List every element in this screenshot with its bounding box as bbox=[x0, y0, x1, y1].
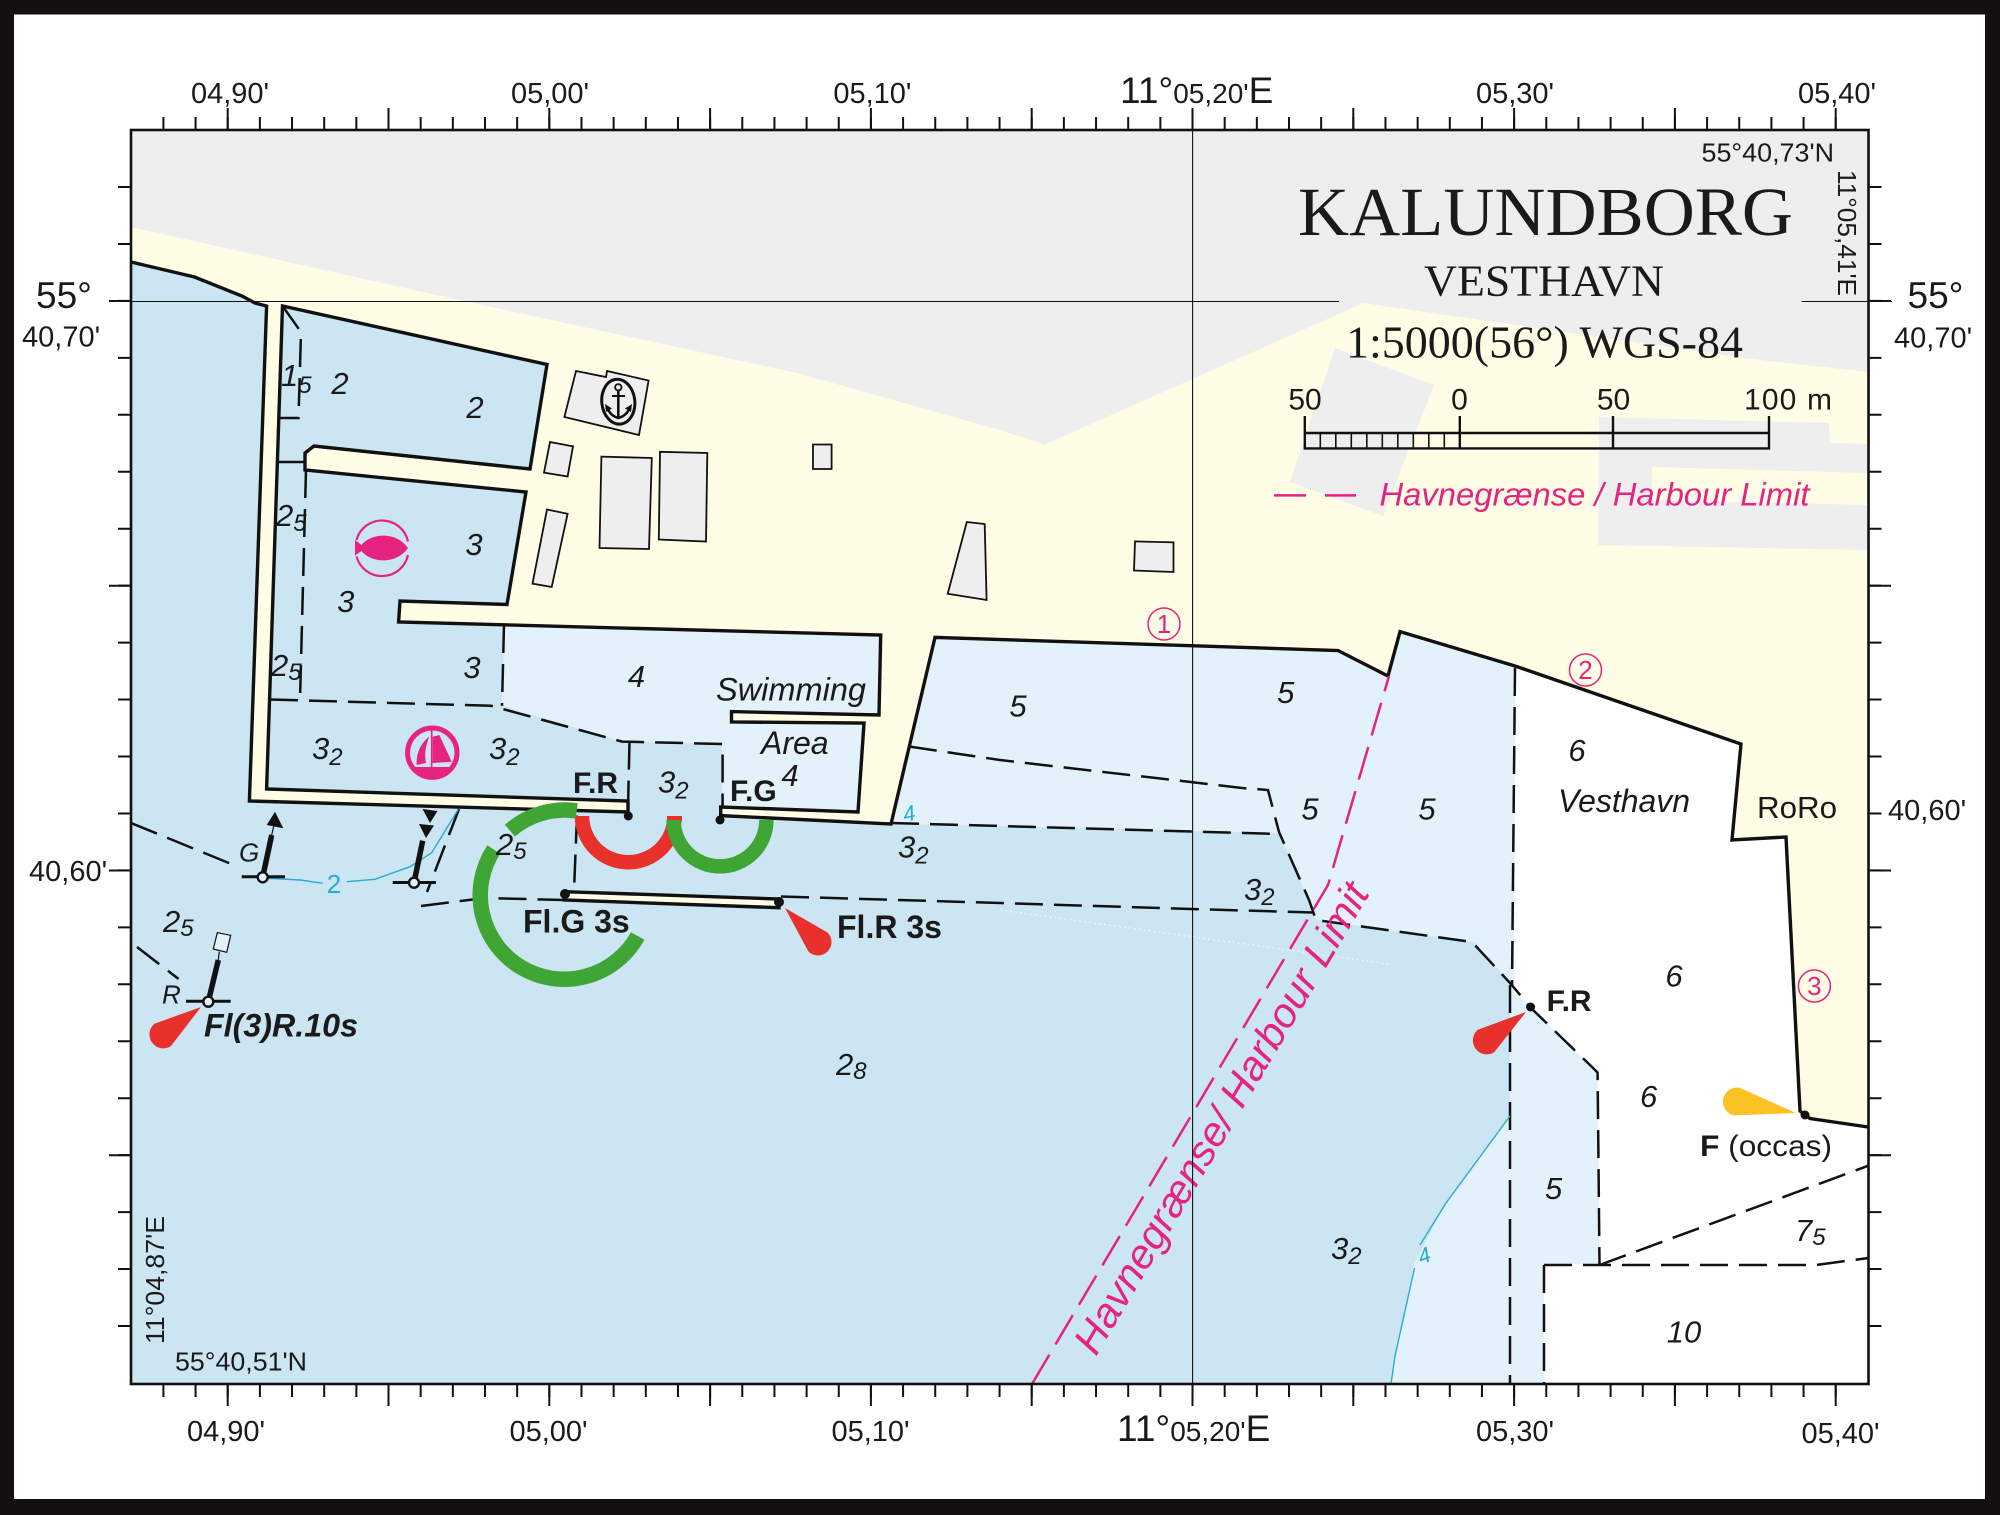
numbered markers bbox=[1148, 608, 1830, 1002]
right latitude labels bbox=[1888, 275, 1972, 827]
top longitude labels bbox=[191, 70, 1876, 111]
light flare: Fl.R 3s bbox=[785, 908, 831, 955]
light sector: F.G green arc bbox=[674, 820, 766, 866]
light labels bbox=[204, 767, 1832, 1163]
sounding 2.5: 5 bbox=[288, 659, 302, 686]
water: deep white zone bbox=[1514, 666, 1868, 1384]
scale label 0: 0 bbox=[1451, 384, 1468, 417]
left label 40,70: 40,70' bbox=[22, 322, 100, 354]
label RoRo: RoRo bbox=[1757, 790, 1837, 825]
building with anchor bbox=[564, 371, 649, 435]
sounding 6: 6 bbox=[1640, 1079, 1658, 1114]
cyan contour label 4: 4 bbox=[1414, 1242, 1434, 1269]
label Swimming: Swimming bbox=[716, 671, 866, 707]
sounding 3.2: 2 bbox=[914, 843, 929, 870]
detached breakwater bbox=[564, 892, 779, 908]
panel: chart map area bbox=[109, 130, 1892, 1384]
sounding 3: 3 bbox=[465, 527, 483, 562]
right label 40,60: 40,60' bbox=[1888, 795, 1966, 827]
light sector: F.R red arc bbox=[582, 816, 675, 862]
top label 05,10: 05,10' bbox=[833, 78, 911, 110]
title block bbox=[1298, 174, 1793, 368]
sounding 7.5: 7 bbox=[1795, 1213, 1812, 1248]
bottom label 05,30: 05,30' bbox=[1476, 1416, 1554, 1448]
red sector cap bbox=[667, 816, 682, 821]
marker 2: 2 bbox=[1578, 655, 1593, 685]
graticule lines bbox=[109, 130, 1892, 1384]
light flare: F.R east bbox=[1473, 1012, 1526, 1054]
cyan contour label 4 near pier: 4 bbox=[901, 800, 918, 827]
water: harbour light depth zone bbox=[891, 632, 1600, 1384]
marker 3 bbox=[1798, 970, 1830, 1002]
cyan 4 metre contour bbox=[1391, 1268, 1414, 1384]
sounding 3.2: 3 bbox=[1244, 872, 1261, 907]
label beacon R: R bbox=[162, 979, 181, 1009]
light sector: Fl.G upper green arc bbox=[510, 810, 577, 831]
sounding 5: 5 bbox=[1009, 688, 1027, 723]
corner coordinates bbox=[140, 137, 1862, 1377]
sounding 3.2: 3 bbox=[658, 765, 675, 800]
sounding 3.2: 3 bbox=[489, 731, 506, 766]
place labels bbox=[162, 671, 1837, 1009]
scale and datum: 1:5000(56°) WGS-84 bbox=[1346, 317, 1743, 368]
building bbox=[1134, 541, 1174, 572]
cyan 2 metre contour continued bbox=[347, 809, 458, 882]
left latitude labels bbox=[22, 275, 107, 888]
label beacon G: G bbox=[239, 838, 259, 868]
label F.R east: F.R bbox=[1547, 985, 1592, 1018]
faint dotted line bbox=[1000, 910, 1389, 964]
sounding 1.5: 5 bbox=[298, 372, 312, 399]
harbour limit dashed line bbox=[1032, 676, 1389, 1384]
sounding 2: 2 bbox=[330, 366, 349, 401]
label F.R pier: F.R bbox=[573, 767, 618, 800]
sounding 7.5: 5 bbox=[1812, 1224, 1826, 1251]
coordinate bottom left longitude: 11°04,87'E bbox=[140, 1216, 170, 1344]
sounding 2.5: 5 bbox=[180, 915, 194, 942]
icon: anchor bbox=[600, 378, 637, 426]
sounding 1.5: 1 bbox=[281, 358, 298, 393]
cyan contour label 2: 2 bbox=[327, 869, 341, 899]
icon: sailing boat bbox=[408, 727, 457, 780]
land: grey industrial block bbox=[1598, 417, 1868, 550]
depth contour dashed lines bbox=[131, 306, 1869, 1384]
label F.G pier: F.G bbox=[730, 775, 777, 808]
sounding 3: 3 bbox=[337, 584, 354, 619]
sounding 2.8: 8 bbox=[853, 1058, 867, 1085]
icon: fish bbox=[355, 520, 408, 576]
right label 55°: 55° bbox=[1908, 275, 1963, 316]
building bbox=[544, 442, 573, 476]
label Fl.G 3s: Fl.G 3s bbox=[523, 904, 630, 940]
sounding 3: 3 bbox=[463, 650, 481, 685]
coordinate bottom left latitude: 55°40,51'N bbox=[175, 1347, 307, 1377]
light dot markers bbox=[560, 812, 1810, 1120]
scale bar bbox=[1288, 384, 1832, 448]
sounding 2: 2 bbox=[465, 390, 484, 425]
land: grey built-up area bbox=[131, 130, 1869, 460]
marker 3: 3 bbox=[1807, 971, 1822, 1001]
subtitle VESTHAVN: VESTHAVN bbox=[1424, 257, 1664, 306]
harbour limit rotated label: Havnegrænse/ Harbour Limit bbox=[1064, 873, 1379, 1362]
map border bbox=[131, 130, 1868, 1384]
top label 05,00: 05,00' bbox=[511, 78, 589, 110]
label Fl.R 3s: Fl.R 3s bbox=[837, 909, 942, 945]
marker 2 bbox=[1570, 654, 1602, 686]
sounding 5: 5 bbox=[1301, 792, 1319, 826]
sounding 3.2: 2 bbox=[328, 744, 343, 771]
label Fl(3)R.10s: Fl(3)R.10s bbox=[204, 1008, 358, 1044]
sounding 3.2: 2 bbox=[1347, 1243, 1362, 1270]
scale label 100 m: 100 m bbox=[1744, 384, 1832, 417]
building bbox=[948, 522, 987, 600]
sounding 2.5: 5 bbox=[513, 838, 527, 865]
bottom longitude labels bbox=[187, 1408, 1880, 1450]
beacon with down triangles bbox=[393, 809, 438, 888]
sounding 3.2: 2 bbox=[1260, 884, 1275, 911]
left label 40,60: 40,60' bbox=[29, 856, 107, 888]
sounding 2.5: 2 bbox=[276, 498, 293, 533]
light flare: F occas yellow bbox=[1723, 1088, 1796, 1115]
sounding 6: 6 bbox=[1568, 733, 1586, 768]
light flare: Fl(3)R bbox=[149, 1007, 201, 1048]
light sector: Fl.G main green arc bbox=[480, 850, 638, 979]
sounding 2.5: 5 bbox=[293, 510, 307, 537]
sounding 5: 5 bbox=[1418, 792, 1436, 826]
sounding 5: 5 bbox=[1545, 1171, 1563, 1206]
top label 05,40: 05,40' bbox=[1798, 78, 1876, 110]
building bbox=[532, 510, 568, 587]
scale label 50: 50 bbox=[1288, 384, 1322, 417]
label Vesthavn: Vesthavn bbox=[1558, 783, 1690, 819]
sounding 3.2: 2 bbox=[505, 744, 520, 771]
building bbox=[813, 444, 832, 469]
water: swimming area light depth zone bbox=[502, 625, 880, 812]
left label 55°: 55° bbox=[36, 275, 92, 316]
sounding 3.2: 3 bbox=[898, 830, 915, 865]
top label 04,90: 04,90' bbox=[191, 78, 269, 110]
right label 40,70: 40,70' bbox=[1894, 322, 1972, 354]
sounding 6: 6 bbox=[1665, 959, 1683, 994]
top label 05,30: 05,30' bbox=[1476, 78, 1554, 110]
coordinate top right latitude: 55°40,73'N bbox=[1702, 137, 1834, 167]
sounding 10: 10 bbox=[1667, 1314, 1701, 1350]
legend: harbour limit: Havnegrænse / Harbour Limit bbox=[1380, 477, 1811, 513]
sea: shallow blue water bbox=[131, 130, 1869, 1384]
bottom label 11°05,20'E: 11°05,20'E bbox=[1117, 1408, 1270, 1449]
sounding 2.5: 2 bbox=[271, 648, 288, 683]
sounding 4: 4 bbox=[628, 659, 645, 694]
bottom label 05,00: 05,00' bbox=[509, 1416, 588, 1448]
coastline outline bbox=[131, 262, 1868, 1127]
bottom label 05,40: 05,40' bbox=[1801, 1418, 1880, 1450]
sounding 3.2: 3 bbox=[312, 731, 329, 766]
marker 1 bbox=[1148, 608, 1180, 640]
sounding 2.8: 2 bbox=[836, 1047, 853, 1082]
bottom label 05,10: 05,10' bbox=[831, 1416, 910, 1448]
cyan 4 metre contour continued bbox=[1420, 1116, 1510, 1245]
bottom label 04,90: 04,90' bbox=[187, 1416, 265, 1448]
marker 1: 1 bbox=[1157, 609, 1171, 639]
beacon G bbox=[242, 812, 285, 882]
sounding 3.2: 2 bbox=[674, 778, 689, 805]
building bbox=[600, 457, 652, 549]
label F (occas): F (occas) bbox=[1700, 1130, 1832, 1163]
sounding 3.2: 3 bbox=[1331, 1231, 1348, 1266]
label Area: Area bbox=[759, 725, 829, 761]
top label 11°05,20'E: 11°05,20'E bbox=[1120, 70, 1273, 111]
building bbox=[659, 452, 707, 542]
land: yellow shore bbox=[131, 227, 1868, 1127]
sounding 4: 4 bbox=[781, 758, 799, 793]
title KALUNDBORG: KALUNDBORG bbox=[1298, 174, 1793, 250]
buildings bbox=[532, 371, 1174, 600]
scale label 50: 50 bbox=[1597, 384, 1630, 417]
cyan 2 metre contour bbox=[263, 878, 323, 883]
tick scales bbox=[120, 119, 1880, 1395]
sounding 2.5: 2 bbox=[496, 827, 513, 862]
sounding 5: 5 bbox=[1277, 675, 1295, 710]
beacon R bbox=[186, 933, 231, 1007]
land: grey parallelogram area bbox=[1290, 348, 1434, 516]
coordinate top right longitude: 11°05,41'E bbox=[1832, 170, 1862, 296]
sounding 2.5: 2 bbox=[163, 904, 180, 939]
depth soundings bbox=[162, 358, 1826, 1350]
